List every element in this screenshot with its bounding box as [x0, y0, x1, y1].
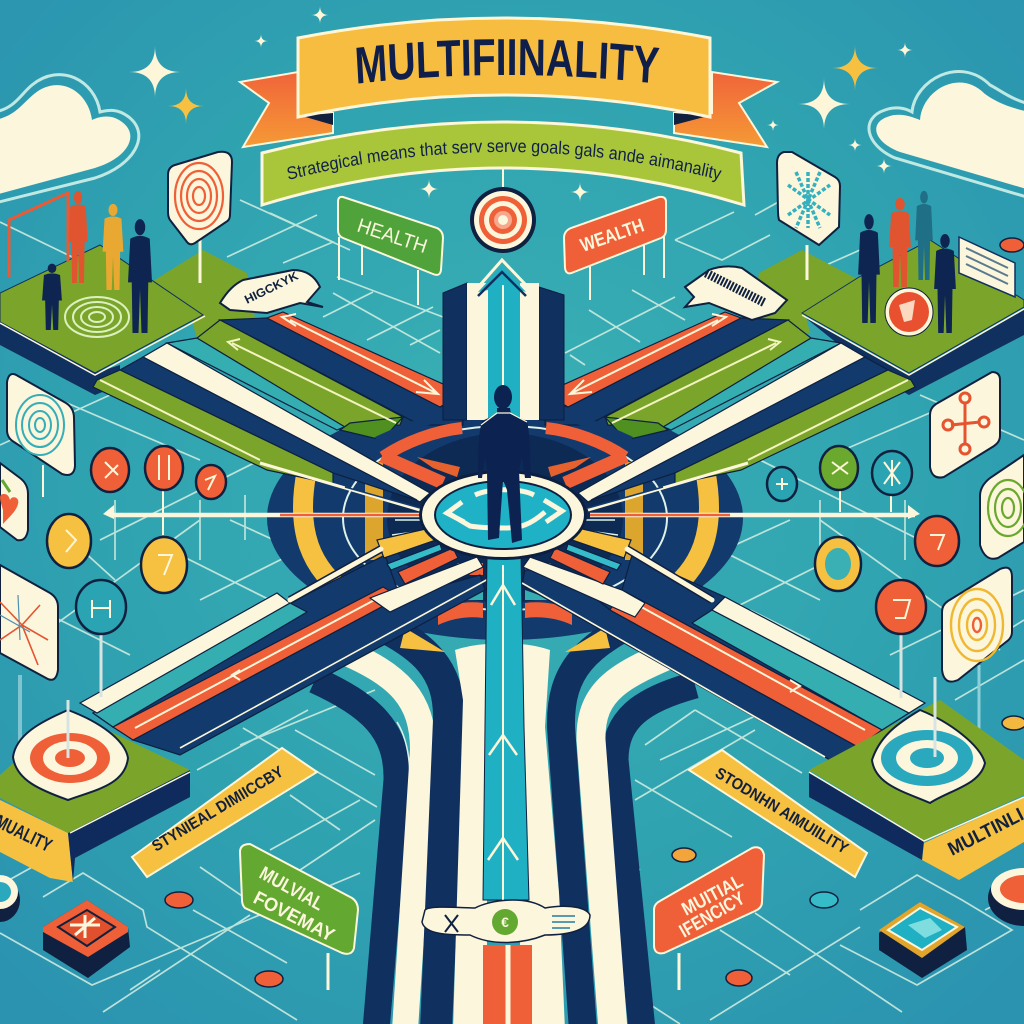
sign: wealth — [564, 197, 666, 300]
sign: red burst left — [0, 565, 58, 745]
yellow banner: right — [689, 750, 867, 877]
platform: upper left — [0, 191, 257, 395]
cloud: right — [869, 72, 1024, 198]
speech bubble: left — [220, 269, 323, 313]
concentric rings around the hub — [267, 396, 743, 640]
round badges left — [47, 446, 226, 697]
ribbon tail: left — [240, 72, 333, 147]
horizontal arrow: right — [590, 505, 920, 519]
people group left — [42, 191, 152, 333]
token: orange hexagon — [43, 900, 130, 978]
central figure in suit — [478, 385, 531, 543]
sign pole base — [198, 240, 202, 283]
token: blue square — [879, 902, 967, 978]
icon: target — [13, 700, 128, 800]
sign: green spiral right — [980, 455, 1024, 559]
small markers — [165, 238, 1024, 987]
title text — [356, 39, 660, 84]
sign text line 2: FOVEMAY — [250, 888, 338, 947]
round badges right — [767, 446, 959, 698]
center callout bottom: € — [501, 914, 509, 930]
sign text line 1: MULVIAL — [256, 863, 327, 915]
title ribbon — [238, 16, 780, 148]
sign text line 2: IFENCICY — [676, 888, 749, 942]
banner text: STODNHN AIMUIILITY — [712, 765, 851, 858]
sign: snowflake top right — [777, 152, 840, 280]
subtitle text: Strategical means that serv serve goals gals ande aimanality — [288, 140, 722, 182]
icon: green spiral on ground — [65, 297, 129, 337]
upper central road with arrow — [443, 260, 564, 420]
orange sign: bottom — [654, 847, 764, 990]
road bundle: lower right — [522, 528, 925, 760]
center road strands: right — [520, 615, 695, 1024]
sign: heart left — [0, 463, 28, 540]
center callout bottom — [422, 900, 590, 942]
central hub disc — [419, 470, 587, 560]
cloud: left — [0, 75, 139, 203]
icon: target — [872, 677, 985, 803]
sign text: HEALTH — [354, 215, 430, 258]
road bundle: upper right — [545, 312, 915, 510]
road bundle: upper left — [93, 312, 463, 510]
icon: red target on ground — [885, 288, 933, 336]
platform: lower right with target — [809, 677, 1024, 880]
green sign: bottom — [240, 844, 358, 990]
info board — [959, 237, 1015, 297]
orange arcs above hub — [377, 412, 631, 483]
sign text line 1: MUITIAL — [678, 871, 747, 920]
stars — [129, 6, 913, 202]
bubble text: HIGCKYK — [242, 269, 301, 307]
sign: health — [338, 197, 443, 305]
road bundle: lower left — [80, 528, 490, 755]
banner text: STYNIEAL DIMIICCBY — [149, 763, 287, 855]
speech bubble: right — [685, 266, 787, 320]
yellow banner: left — [132, 748, 317, 877]
title text: MULTIFIINALITY — [356, 39, 660, 84]
platform: lower left with target — [0, 700, 190, 882]
platform: upper right — [749, 191, 1024, 395]
token: partial left — [0, 875, 20, 922]
center road strands: left — [315, 620, 487, 1024]
ribbon tail: right — [674, 72, 777, 147]
horizontal arrow: left — [103, 505, 420, 519]
goal target: top center — [470, 168, 536, 253]
icon: goal frame — [9, 193, 68, 277]
sign text: WEALTH — [578, 215, 647, 257]
subtitle ribbon — [260, 120, 746, 208]
sign: network right — [930, 372, 1000, 478]
sign: orange spiral top left — [168, 152, 232, 244]
center cyan lane — [483, 552, 532, 1024]
sign: cyan spiral left — [7, 374, 75, 497]
token: partial right — [988, 868, 1024, 926]
sign: yellow spiral right — [942, 568, 1012, 733]
ribbon band — [298, 18, 710, 117]
people group right — [858, 191, 956, 333]
